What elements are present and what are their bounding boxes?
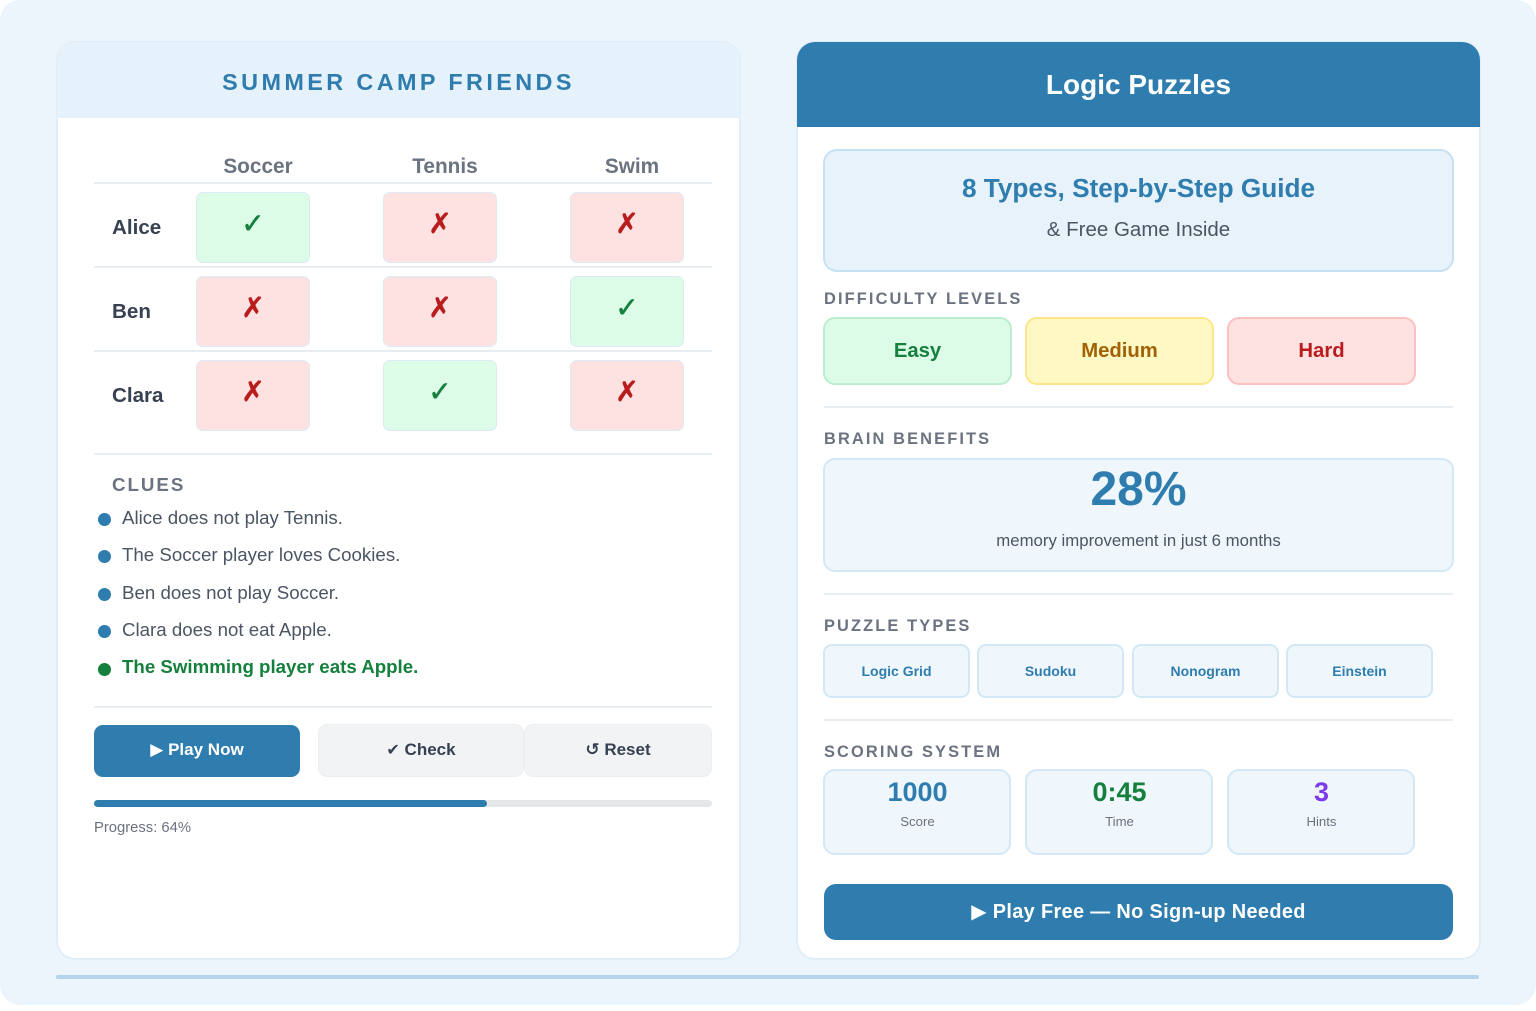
chip: einstein: Einstein — [1332, 663, 1387, 679]
cell: Alice swim no: ✗ — [615, 207, 639, 240]
chip: logic grid: Logic Grid — [862, 663, 932, 679]
subtitle text: & Free Game Inside — [1047, 218, 1230, 241]
difficulty: hard: Hard — [1298, 340, 1345, 362]
chip: logic grid — [823, 644, 970, 698]
clue 3: Ben does not play Soccer. — [122, 582, 339, 603]
cell: Alice swim no — [570, 192, 684, 263]
progress label: Progress: 64% — [94, 820, 191, 836]
cell: Clara soccer no — [196, 360, 310, 431]
bullet 5 — [98, 663, 111, 676]
section label: difficulty levels: DIFFICULTY LEVELS — [824, 290, 1022, 308]
bullet 4 — [98, 625, 111, 638]
button: reset — [524, 724, 712, 777]
cell: Ben swim yes — [570, 276, 684, 347]
cell: Alice soccer yes — [196, 192, 310, 263]
cell: Clara tennis yes — [383, 360, 497, 431]
difficulty: easy — [823, 317, 1012, 385]
cell: Ben swim yes: ✓ — [615, 291, 639, 324]
chip: sudoku: Sudoku — [1025, 663, 1076, 679]
cell: Ben tennis no — [383, 276, 497, 347]
button: play free — [824, 884, 1453, 940]
panel: logic puzzles — [796, 41, 1481, 960]
difficulty: hard — [1227, 317, 1416, 385]
score label: Score — [900, 814, 935, 829]
cell: Ben soccer no: ✗ — [241, 291, 265, 324]
chip: nonogram — [1132, 644, 1279, 698]
clue 1: Alice does not play Tennis. — [122, 507, 343, 528]
cell: Alice tennis no — [383, 192, 497, 263]
cell: Clara swim no — [570, 360, 684, 431]
column: tennis: Tennis — [412, 155, 478, 178]
bullet 3 — [98, 588, 111, 601]
button: check: ✔ Check — [386, 740, 456, 759]
section label: scoring system: SCORING SYSTEM — [824, 743, 1002, 761]
difficulty: medium — [1025, 317, 1214, 385]
score card — [823, 769, 1011, 855]
cell: Clara soccer no: ✗ — [241, 375, 265, 408]
section label: puzzle types: PUZZLE TYPES — [824, 617, 971, 635]
chip: sudoku — [977, 644, 1124, 698]
button: play now — [94, 725, 300, 777]
stat caption: memory improvement in just 6 months — [996, 531, 1281, 550]
bullet 1 — [98, 513, 111, 526]
clue 4: Clara does not eat Apple. — [122, 619, 332, 640]
cell: Alice soccer yes: ✓ — [241, 207, 265, 240]
grid: column headers — [223, 155, 659, 178]
hints card — [1227, 769, 1415, 855]
progress fill — [94, 800, 487, 807]
hints label: Hints — [1306, 814, 1337, 829]
footer line — [56, 975, 1479, 979]
row label: Alice: Alice — [112, 216, 161, 239]
bullet 2 — [98, 550, 111, 563]
cell: Alice tennis no: ✗ — [428, 207, 452, 240]
button: reset: ↺ Reset — [585, 740, 651, 759]
button: check — [318, 724, 524, 777]
subtitle box — [823, 149, 1454, 272]
cell: Ben tennis no: ✗ — [428, 291, 452, 324]
row label: Clara: Clara — [112, 384, 164, 407]
difficulty: easy: Easy — [894, 340, 941, 362]
button: play now: ▶ Play Now — [150, 740, 244, 759]
clues heading: CLUES — [112, 474, 185, 495]
cell: Clara swim no: ✗ — [615, 375, 639, 408]
header title: Logic Puzzles — [1046, 69, 1231, 100]
subtitle heading: 8 Types, Step-by-Step Guide — [962, 173, 1315, 203]
time label: Time — [1105, 814, 1134, 829]
left panel heading — [57, 42, 740, 118]
hints value: 3 — [1314, 777, 1329, 807]
stat value: 28% — [1090, 463, 1187, 516]
panel: summer camp friends — [56, 41, 741, 960]
button: play free: ▶ Play Free — No Sign-up Needed — [971, 901, 1306, 923]
difficulty: medium: Medium — [1081, 340, 1158, 362]
progress bar — [94, 800, 712, 807]
row label: Ben: Ben — [112, 300, 151, 323]
clue 5 highlighted: The Swimming player eats Apple. — [122, 656, 418, 677]
chip: einstein — [1286, 644, 1433, 698]
clue 2: The Soccer player loves Cookies. — [122, 544, 400, 565]
section label: brain benefits: BRAIN BENEFITS — [824, 430, 991, 448]
cell: Ben soccer no — [196, 276, 310, 347]
right panel header — [797, 42, 1480, 127]
time value: 0:45 — [1092, 777, 1147, 807]
chip: nonogram: Nonogram — [1170, 663, 1240, 679]
time card — [1025, 769, 1213, 855]
heading text: SUMMER CAMP FRIENDS — [222, 69, 575, 95]
column: swim: Swim — [605, 155, 659, 178]
column: soccer: Soccer — [223, 155, 293, 178]
score value: 1000 — [887, 777, 948, 807]
stat box — [823, 458, 1454, 572]
cell: Clara tennis yes: ✓ — [428, 375, 452, 408]
